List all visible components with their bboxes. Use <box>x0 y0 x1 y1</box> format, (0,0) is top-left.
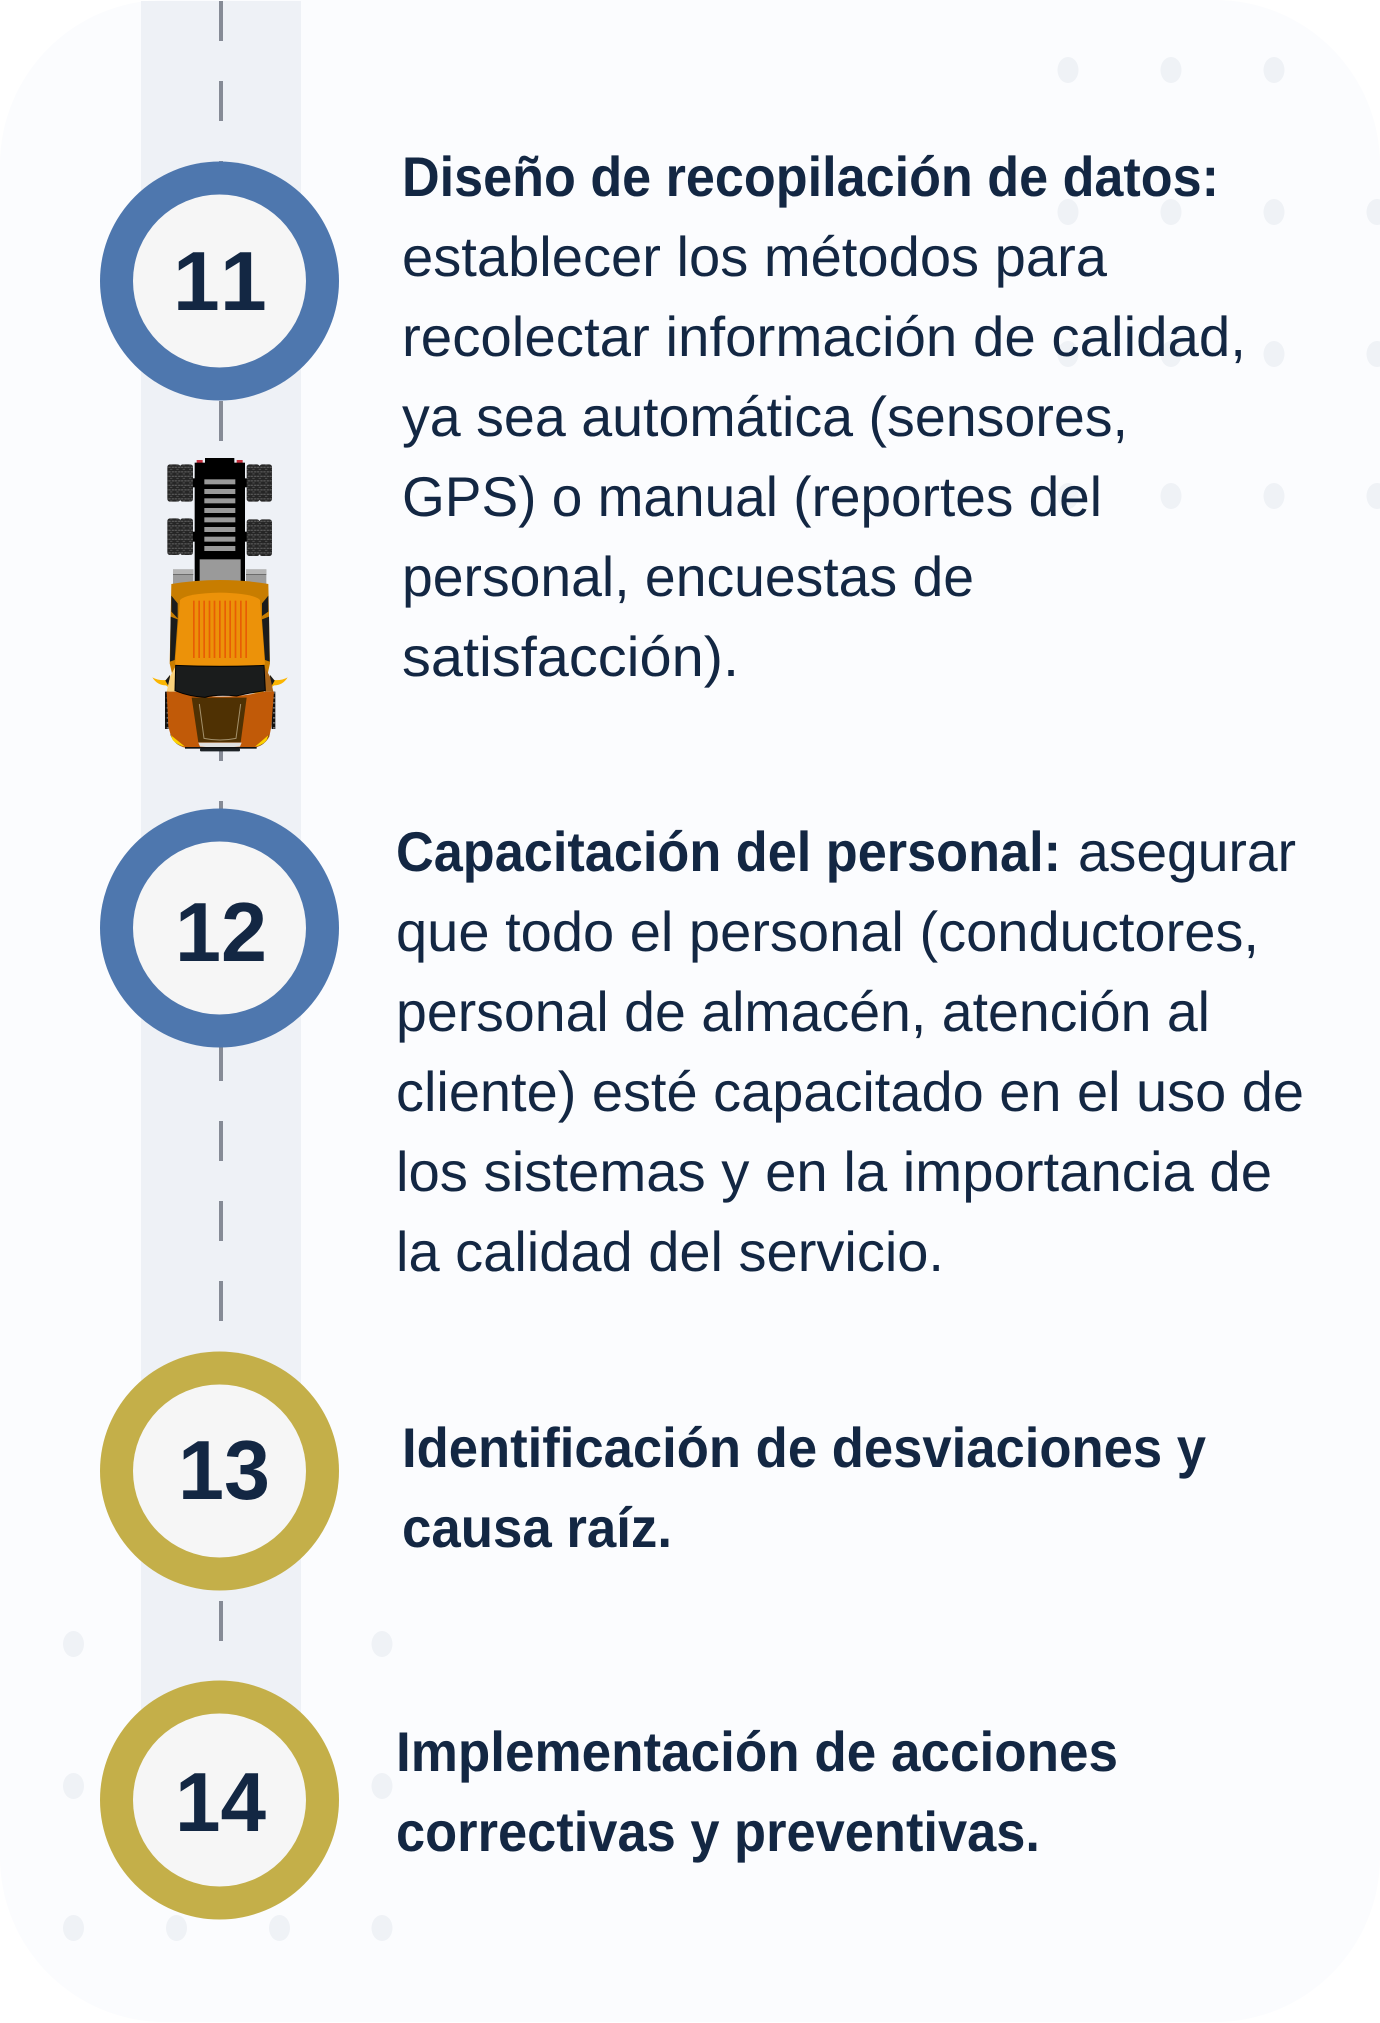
step 12 badge: 12 <box>175 885 267 979</box>
step 12 text: cliente) esté capacitado en el uso de <box>396 1060 1304 1123</box>
step 11 badge <box>100 162 339 400</box>
step 14 badge <box>100 1680 339 1920</box>
step 11 text: establecer los métodos para <box>402 225 1108 288</box>
step 11 text: personal, encuestas de <box>402 545 974 608</box>
step 11 text <box>402 145 1246 688</box>
dot grid: top right <box>1058 57 1380 509</box>
step 12 text: que todo el personal (conductores, <box>396 900 1259 963</box>
step 14 text: correctivas y preventivas. <box>396 1800 1040 1863</box>
step 13 text <box>402 1416 1206 1559</box>
step 11 text: Diseño de recopilación de datos: <box>402 145 1219 208</box>
step 12 text: personal de almacén, atención al <box>396 980 1210 1043</box>
step 12 text: los sistemas y en la importancia de <box>396 1140 1272 1203</box>
rear wheels <box>167 464 272 556</box>
step 11 text: GPS) o manual (reportes del <box>402 465 1102 528</box>
step 11 badge: 11 <box>173 234 267 328</box>
chassis <box>173 458 266 584</box>
step 12 badge <box>100 808 339 1048</box>
step 12 text: asegurar <box>1078 820 1296 883</box>
windshield <box>175 665 265 697</box>
mirrors <box>152 675 288 689</box>
cab <box>167 580 273 693</box>
icon: truck <box>152 458 288 752</box>
step 11 text: recolectar información de calidad, <box>402 305 1246 368</box>
road <box>141 1 301 1801</box>
step 12 text: la calidad del servicio. <box>396 1220 944 1283</box>
step 13 badge: 13 <box>178 1423 270 1517</box>
step 12 text <box>396 820 1304 1283</box>
step 13 badge <box>100 1352 339 1590</box>
step 12 text: Capacitación del personal: <box>396 820 1061 883</box>
step 14 text <box>396 1720 1118 1863</box>
hood side treads <box>165 692 275 729</box>
dot grid: bottom left <box>63 1631 392 1941</box>
step 14 text: Implementación de acciones <box>396 1720 1118 1783</box>
step 11 text: ya sea automática (sensores, <box>402 385 1128 448</box>
hood <box>167 692 274 751</box>
step 14 badge: 14 <box>175 1755 266 1849</box>
step 13 text: causa raíz. <box>402 1496 672 1559</box>
step 13 text: Identificación de desviaciones y <box>402 1416 1206 1479</box>
step 11 text: satisfacción). <box>402 625 739 688</box>
